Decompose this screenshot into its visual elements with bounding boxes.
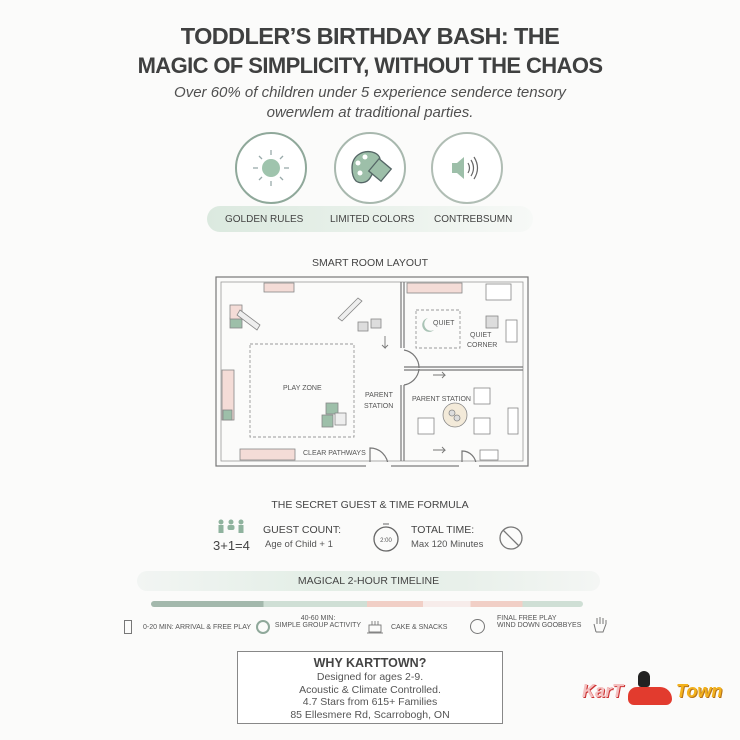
timeline heading band: MAGICAL 2-HOUR TIMELINE bbox=[298, 575, 439, 587]
subtitle: owerwlem at traditional parties. bbox=[267, 104, 473, 121]
info box: why karttown bbox=[237, 651, 503, 724]
icon: hand bbox=[594, 617, 606, 632]
logo: karttown: Town bbox=[676, 681, 722, 701]
timeline heading band bbox=[137, 571, 600, 591]
title bbox=[138, 23, 602, 78]
icon row: golden rules, limited colors, contrast: CONTREBSUMN bbox=[434, 214, 512, 225]
timeline labels: WIND DOWN GOOBBYES bbox=[497, 622, 581, 629]
formula row: Max 120 Minutes bbox=[411, 539, 483, 550]
logo: karttown bbox=[582, 671, 723, 705]
icon row: golden rules, limited colors, contrast: LIMITED COLORS bbox=[330, 214, 414, 225]
floor plan: CLEAR PATHWAYS bbox=[303, 450, 366, 457]
icon: stopwatch: 2:00 bbox=[380, 538, 392, 544]
icon: sun bbox=[236, 133, 306, 203]
title: TODDLER’S BIRTHDAY BASH: THE bbox=[181, 23, 559, 49]
icon: ball bbox=[470, 619, 485, 634]
timeline labels: FINAL FREE PLAY bbox=[497, 615, 557, 622]
floor plan: QUIET bbox=[433, 320, 455, 327]
info box: why karttown: Designed for ages 2-9. bbox=[317, 671, 423, 683]
icon: cake bbox=[367, 621, 383, 634]
info box: why karttown: WHY KARTTOWN? bbox=[314, 656, 426, 670]
formula row bbox=[213, 520, 523, 553]
floor plan: STATION bbox=[364, 403, 393, 410]
timeline labels: 40-60 MIN: bbox=[301, 615, 335, 622]
formula row: Age of Child + 1 bbox=[265, 539, 333, 550]
icon: ring bbox=[256, 620, 270, 634]
info box: why karttown: 85 Ellesmere Rd, Scarrobogh, ON bbox=[290, 708, 450, 720]
subtitle bbox=[174, 84, 567, 121]
icon: door bbox=[124, 620, 132, 634]
floor plan: PLAY ZONE bbox=[283, 385, 322, 392]
floor plan bbox=[215, 276, 529, 467]
info box: why karttown: Acoustic & Climate Controlled. bbox=[299, 684, 441, 696]
timeline labels bbox=[124, 615, 606, 634]
icon: no bbox=[499, 526, 523, 550]
icon: palette bbox=[335, 133, 405, 203]
floor plan: CORNER bbox=[467, 342, 497, 349]
timeline labels: 0-20 MIN: ARRIVAL & FREE PLAY bbox=[143, 624, 251, 631]
icon: people bbox=[218, 520, 244, 533]
timeline bar bbox=[151, 601, 583, 607]
furniture bbox=[222, 283, 518, 460]
info box: why karttown: 4.7 Stars from 615+ Families bbox=[303, 696, 437, 708]
icon: stopwatch bbox=[373, 524, 399, 552]
floor plan: PARENT STATION bbox=[412, 396, 471, 403]
guest count text: GUEST COUNT: bbox=[263, 524, 341, 536]
icon row: golden rules, limited colors, contrast bbox=[207, 132, 512, 232]
title: MAGIC OF SIMPLICITY, WITHOUT THE CHAOS bbox=[138, 53, 602, 78]
timeline labels: CAKE & SNACKS bbox=[391, 624, 447, 631]
labels: GOLDEN RULES bbox=[225, 214, 303, 225]
floor plan: PARENT bbox=[365, 392, 394, 399]
total time text: TOTAL TIME: bbox=[411, 524, 474, 536]
heading: smart room layout: SMART ROOM LAYOUT bbox=[312, 257, 428, 269]
subtitle: Over 60% of children under 5 experience senderce tensory bbox=[174, 84, 566, 101]
floor plan: QUIET bbox=[470, 332, 492, 339]
heading: secret guest & time formula: THE SECRET GUEST & TIME FORMULA bbox=[271, 499, 469, 511]
guest count number: 3+1=4 bbox=[213, 538, 250, 553]
icon: speaker bbox=[432, 133, 502, 203]
timeline labels: SIMPLE GROUP ACTIVITY bbox=[275, 622, 361, 629]
logo: karttown: KarT bbox=[582, 681, 623, 701]
label band bbox=[207, 206, 533, 232]
